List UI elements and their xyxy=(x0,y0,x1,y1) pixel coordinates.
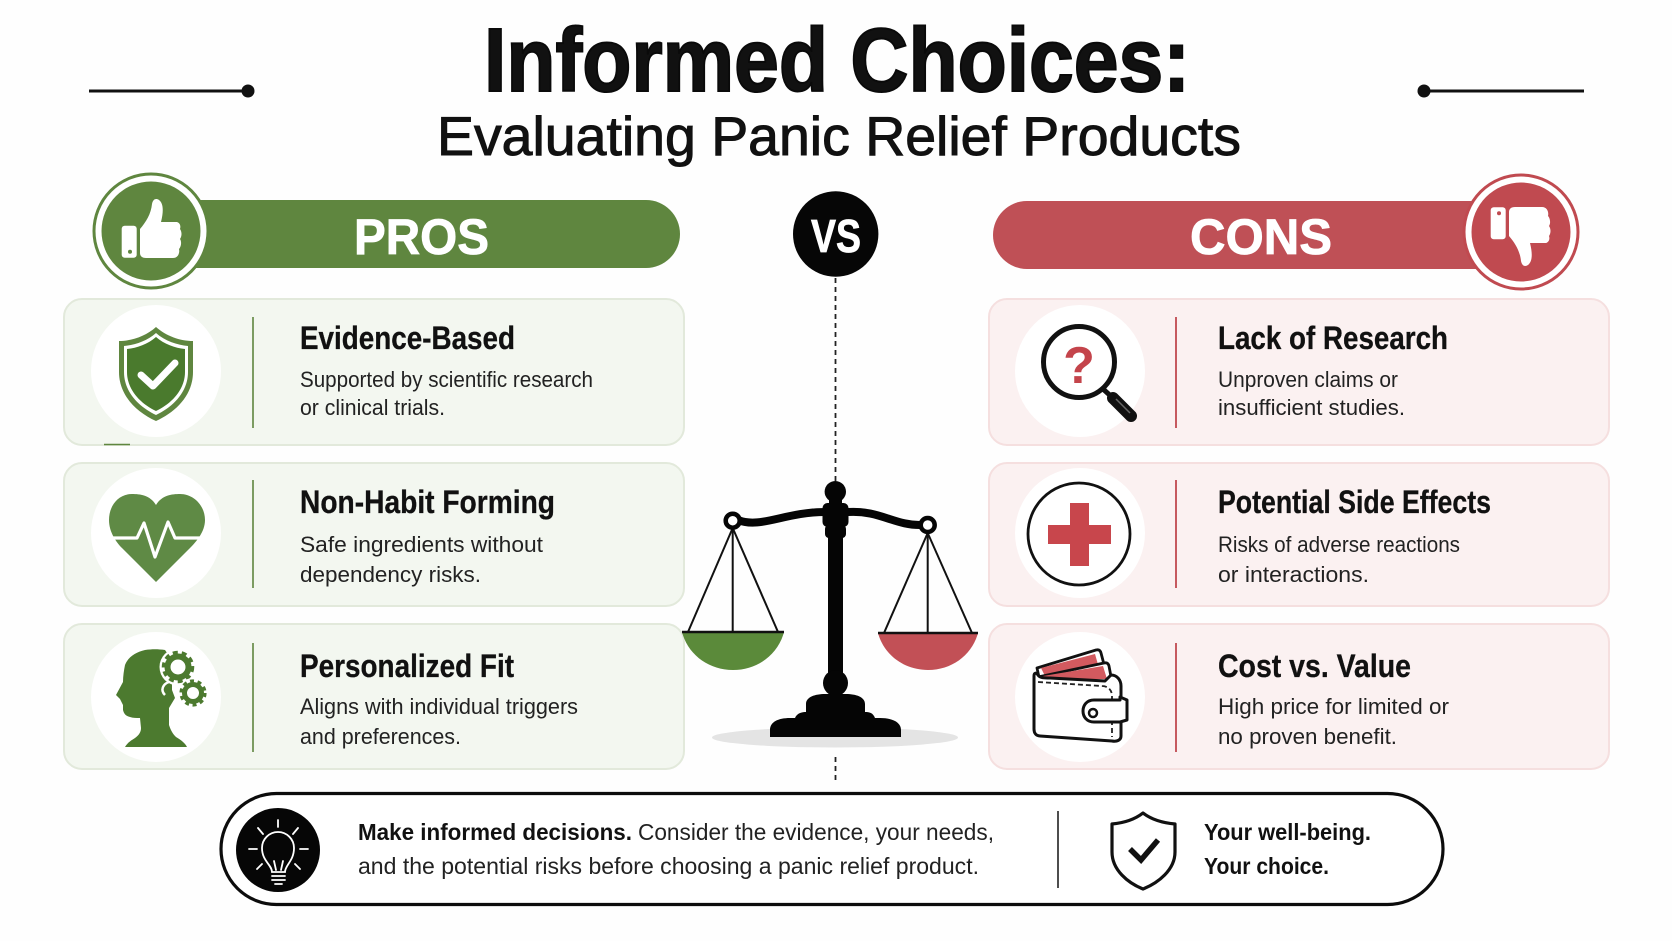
icon: thumbs down xyxy=(1464,175,1578,289)
CONS label: CONS xyxy=(1190,209,1332,265)
description xyxy=(300,532,544,587)
heading: Evidence-Based xyxy=(300,320,515,356)
description: insufficient studies. xyxy=(1218,395,1405,420)
title: Informed Choices: xyxy=(484,11,1190,111)
tagline: Your well-being. xyxy=(1204,819,1371,845)
description: no proven benefit. xyxy=(1218,724,1397,749)
icon: medical cross xyxy=(1015,468,1145,598)
VS badge xyxy=(793,191,878,277)
description: Aligns with individual triggers xyxy=(300,694,578,719)
description: dependency risks. xyxy=(300,562,481,587)
icon: head with gears xyxy=(91,632,221,762)
description xyxy=(300,367,593,420)
message text: Make informed decisions. xyxy=(358,819,632,845)
center divider line top xyxy=(834,278,836,482)
icon: magnifier question xyxy=(1015,305,1145,437)
panel: Non-Habit Forming xyxy=(64,463,684,606)
right title ornament xyxy=(1418,84,1584,98)
left title ornament xyxy=(89,84,254,98)
bottom callout xyxy=(221,794,1443,904)
description xyxy=(300,694,578,749)
description: and preferences. xyxy=(300,724,461,749)
description: Unproven claims or xyxy=(1218,367,1398,392)
icon: heart pulse xyxy=(91,468,221,598)
icon: thumbs up xyxy=(94,174,208,288)
center divider line bottom xyxy=(834,757,836,783)
icon: shield check xyxy=(91,305,221,437)
description: Safe ingredients without xyxy=(300,532,544,557)
description xyxy=(1218,367,1405,420)
heading: Personalized Fit xyxy=(300,648,514,684)
PROS pill xyxy=(151,200,680,268)
PROS label: PROS xyxy=(354,209,489,265)
PROS header xyxy=(94,174,680,288)
balance scale illustration xyxy=(682,481,978,748)
right pan in red xyxy=(878,533,978,670)
CONS header xyxy=(993,175,1578,289)
heading: Potential Side Effects xyxy=(1218,484,1491,520)
panel: Evidence-Based xyxy=(64,299,684,445)
heading: Non-Habit Forming xyxy=(300,484,555,520)
description xyxy=(1218,694,1450,749)
icon: outline shield check xyxy=(1112,813,1175,889)
heading: Lack of Research xyxy=(1218,320,1448,356)
message text xyxy=(358,819,994,879)
panel: Cost vs. Value xyxy=(989,624,1609,769)
description: Risks of adverse reactions xyxy=(1218,532,1460,557)
tagline: Your choice. xyxy=(1204,853,1329,879)
description: or interactions. xyxy=(1218,562,1369,587)
description xyxy=(1218,532,1460,587)
CONS pill xyxy=(993,201,1521,269)
heading: Cost vs. Value xyxy=(1218,648,1411,684)
icon: light bulb xyxy=(236,808,320,892)
tagline xyxy=(1204,819,1371,879)
panel: Personalized Fit xyxy=(64,624,684,769)
description: Supported by scientific research xyxy=(300,367,593,392)
scale stand and beam xyxy=(726,481,935,737)
title block xyxy=(437,11,1241,167)
VS badge: VS xyxy=(811,210,861,262)
icon: wallet xyxy=(1015,632,1145,762)
subtitle: Evaluating Panic Relief Products xyxy=(437,105,1241,167)
left pan in green xyxy=(682,528,784,670)
description: High price for limited or xyxy=(1218,694,1450,719)
message text: and the potential risks before choosing a panic relief product. xyxy=(358,853,979,879)
icon: magnifier question: ? xyxy=(1063,337,1095,395)
description: or clinical trials. xyxy=(300,395,445,420)
panel: Lack of Research xyxy=(989,299,1609,445)
panel: Potential Side Effects xyxy=(989,463,1609,606)
message text: Consider the evidence, your needs, xyxy=(638,819,994,845)
